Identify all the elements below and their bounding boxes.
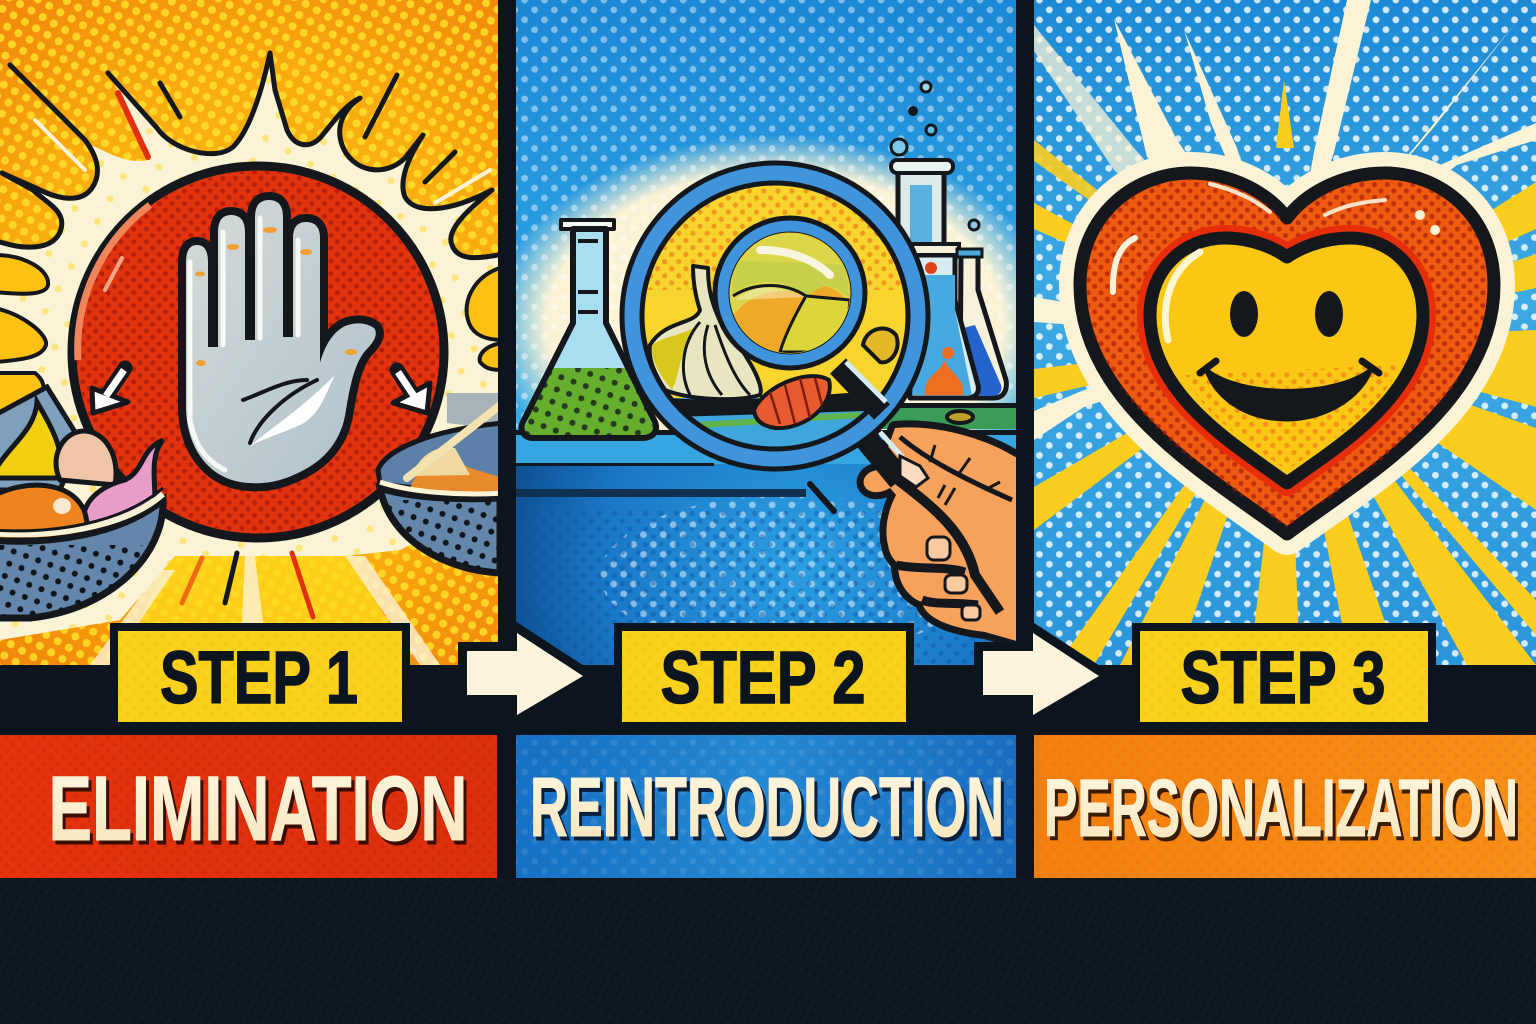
icon: right food bowl [378, 393, 505, 575]
icon: hand holding the magnifier [864, 427, 1020, 642]
icon: green conical flask [522, 220, 656, 438]
step 3 badge: STEP 3 [1180, 636, 1386, 719]
label: reintroduction [516, 735, 1016, 878]
icon: stop hand [186, 200, 376, 483]
side flame lobes [0, 255, 503, 420]
icon: left arrow to bowl [92, 368, 128, 413]
label: elimination: ELIMINATION [48, 758, 468, 860]
panel: step 1 elimination illustration [0, 0, 505, 665]
cream halo behind equipment [516, 136, 1016, 430]
panel: step 2 reintroduction illustration [516, 0, 1016, 665]
icon: left food bowl [0, 387, 170, 620]
yellow bottom rays [138, 555, 388, 623]
burst accent strokes [35, 75, 490, 617]
label: elimination [0, 735, 497, 878]
label: elimination: ELIMINATION [52, 762, 470, 864]
arrow: step 1 to step 2 [467, 633, 583, 715]
panel dividers [498, 0, 1034, 878]
arrow: step 2 to step 3 [983, 633, 1099, 715]
icon: magnifying glass with garlic and food [632, 173, 920, 459]
cream sun rays [1034, 0, 1536, 440]
cream bottom rays [90, 556, 440, 665]
icon: bubbles [891, 82, 979, 230]
lower counter background [516, 432, 1016, 665]
yellow sun rays [1034, 80, 1536, 665]
cream sun burst [0, 53, 498, 640]
black band between illustration and labels [0, 665, 1536, 735]
icon: smiling yellow heart [1150, 238, 1423, 483]
label: personalization [1034, 735, 1536, 878]
label: reintroduction: REINTRODUCTION [533, 764, 1007, 858]
label: reintroduction: REINTRODUCTION [530, 760, 1004, 854]
icon: tall cylinder and flasks [891, 160, 1006, 398]
shelf [516, 403, 1016, 497]
step 1 badge [114, 627, 406, 726]
icon: red stop circle [72, 166, 444, 538]
icon: right arrow to bowl [393, 370, 430, 413]
panel: step 3 personalization illustration [1034, 0, 1536, 665]
accent mark [810, 484, 834, 511]
step 2 badge: STEP 2 [660, 636, 866, 719]
heart cream halo [1080, 173, 1494, 534]
step 1 badge: STEP 1 [160, 636, 358, 719]
icon: orange heart [1080, 173, 1494, 534]
